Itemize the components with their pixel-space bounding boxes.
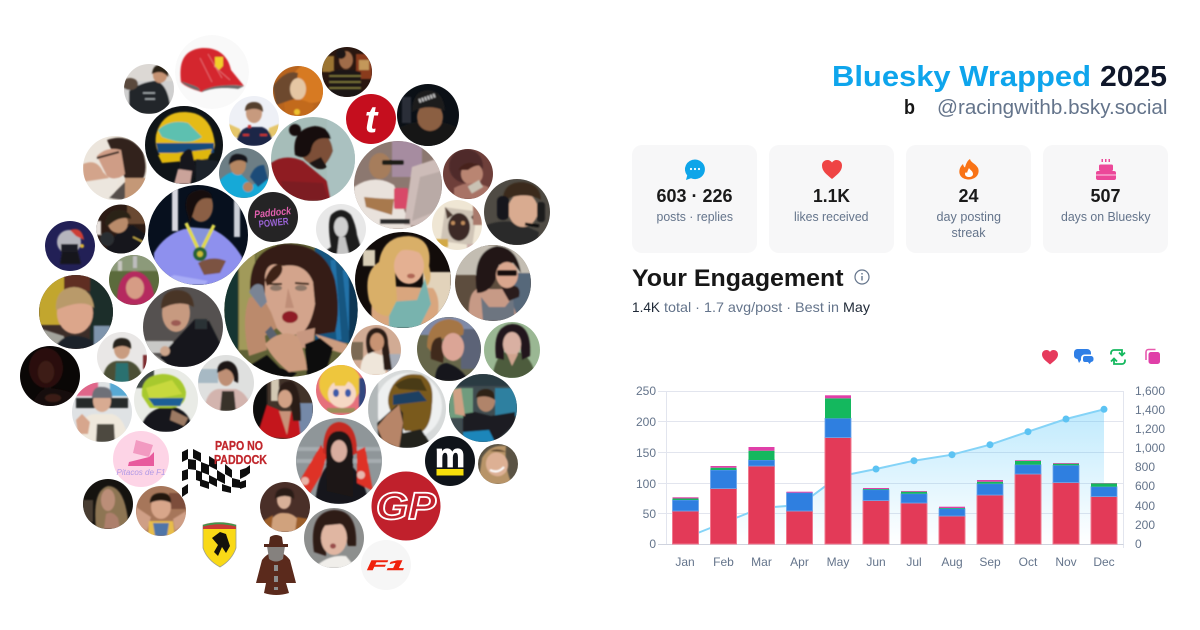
avatar: Papo no Paddock flag logo: PADDOCK xyxy=(214,452,267,467)
avatar: Sailor Moon xyxy=(316,363,366,415)
right axis labels: 800 xyxy=(1135,460,1155,474)
chart legend icons xyxy=(1042,349,1160,364)
right axis labels: 1,000 xyxy=(1135,441,1165,455)
panel: days on Bluesky: days on Bluesky xyxy=(1061,210,1151,224)
avatar: black and white woman xyxy=(316,204,366,254)
avatar: Red Bull driver with wings xyxy=(229,96,279,146)
avatar: driver in dark team kit xyxy=(122,64,174,114)
left axis labels: 200 xyxy=(636,415,656,429)
left axis labels: 50 xyxy=(643,507,656,521)
icon: heart xyxy=(822,160,842,179)
avatar: Papo no Paddock flag logo xyxy=(182,438,267,497)
panel: likes received: likes received xyxy=(794,210,869,224)
right axis labels: 400 xyxy=(1135,499,1155,513)
avatar: Lewis in lilac suit with medal xyxy=(148,185,248,285)
avatar: dark moody red haired woman xyxy=(20,346,80,406)
avatar: red GP logo: GP xyxy=(376,486,437,528)
month labels: Nov xyxy=(1055,555,1077,569)
avatar: m logo xyxy=(425,436,475,486)
avatar: orange hair drag queen xyxy=(273,66,323,116)
right axis labels: 1,200 xyxy=(1135,422,1165,436)
avatar: smiling blonde woman xyxy=(478,444,518,484)
month labels xyxy=(675,555,1115,569)
avatar: man in green sweater xyxy=(97,332,147,382)
avatar: dark haired woman in green xyxy=(484,322,540,378)
avatar: red t logo: t xyxy=(365,99,379,141)
month labels: Mar xyxy=(751,555,772,569)
avatar: man in striped sweater xyxy=(322,47,372,97)
heading: Your Engagement: Your Engagement xyxy=(632,265,844,292)
panel: likes received xyxy=(769,145,894,253)
month labels: Sep xyxy=(979,555,1001,569)
avatar: blonde woman in teal top xyxy=(355,232,451,328)
avatar: woman on phone, largest bubble xyxy=(224,243,359,382)
avatar: chibi anime character xyxy=(45,221,95,271)
bars: replies xyxy=(672,418,1117,516)
chart: monthly engagement stacked bars with cumulative line xyxy=(636,384,1165,569)
month labels: Jul xyxy=(906,555,922,569)
avatar: red GP logo xyxy=(372,472,440,540)
avatar: green and yellow helmet xyxy=(134,368,198,432)
avatar: driver in blue jacket xyxy=(219,148,269,198)
avatar: smiling kid in yellow tank xyxy=(136,486,186,536)
month labels: May xyxy=(827,555,849,569)
avatar: red haired woman drinking xyxy=(443,149,493,199)
avatar: woman in bonnet xyxy=(417,317,481,381)
display name and handle: b xyxy=(904,97,915,119)
avatar: trench coat character xyxy=(256,535,296,595)
right axis labels: 200 xyxy=(1135,518,1155,532)
month labels: Feb xyxy=(713,555,734,569)
avatar: Paddock Power logo xyxy=(248,192,298,242)
avatar: woman with pink hair xyxy=(109,255,159,305)
icon: speech bubble xyxy=(685,159,705,180)
avatar: boy with headset xyxy=(484,179,550,245)
cumulative area and line xyxy=(685,406,1108,544)
avatar: Taylor Swift dark concert xyxy=(83,479,133,529)
avatar: woman hand on chin, white top xyxy=(351,325,401,375)
avatar: Papo no Paddock flag logo: PAPO NO xyxy=(215,438,263,453)
avatar: Paddock Power logo: Paddock xyxy=(254,205,293,221)
avatar: Lewis sunglasses with pink mug xyxy=(354,141,442,229)
panel: day posting streak: 24 xyxy=(958,186,978,206)
right axis labels: 0 xyxy=(1135,537,1142,551)
icon: legend replies xyxy=(1074,349,1094,364)
avatar: F1 logo: F1 xyxy=(367,557,405,573)
avatar: classical painting woman xyxy=(260,482,310,532)
panel: posts and replies: posts · replies xyxy=(656,210,733,224)
month labels: Aug xyxy=(941,555,963,569)
icon: legend reposts xyxy=(1111,350,1125,364)
left axis labels xyxy=(636,384,656,551)
avatar: small dog on screen xyxy=(432,200,482,250)
avatar: woman with glasses lying down xyxy=(83,136,147,200)
bars: likes xyxy=(672,438,1117,544)
engagement summary text: May xyxy=(843,299,870,315)
avatar: Hamilton in red jacket xyxy=(271,117,357,201)
avatar: man in black beanie xyxy=(397,84,459,146)
panel: day posting streak xyxy=(906,145,1031,253)
month labels: Oct xyxy=(1019,555,1038,569)
left axis labels: 100 xyxy=(636,477,656,491)
avatar bubble cluster xyxy=(20,35,550,595)
right axis labels xyxy=(1135,384,1165,551)
avatar: red Ferrari cap xyxy=(179,46,245,94)
avatar: dark haired woman in sunglasses xyxy=(455,245,531,323)
right axis labels: 1,400 xyxy=(1135,403,1165,417)
panel: posts and replies: 603 · 226 xyxy=(656,186,732,206)
avatar: helmet on grey background xyxy=(368,370,446,448)
left axis labels: 0 xyxy=(649,537,656,551)
icon: legend heart xyxy=(1042,350,1058,364)
avatar: woman in red dress xyxy=(253,379,313,439)
avatar: George in black Adidas jacket xyxy=(143,287,223,367)
avatar: Pitacos de F1 pink logo: Pitacos de F1 xyxy=(117,468,165,477)
left axis labels: 250 xyxy=(636,384,656,398)
bars: quotes xyxy=(672,395,1117,508)
icon: birthday cake xyxy=(1096,159,1116,180)
title: 2025 xyxy=(1100,61,1167,93)
icon: flame xyxy=(959,159,979,180)
avatar: blond toddler xyxy=(39,275,114,350)
engagement summary text: 1.4K xyxy=(632,299,661,315)
month labels: Jan xyxy=(675,555,695,569)
avatar: driver in cap, waving xyxy=(72,382,132,442)
avatar: Pitacos de F1 pink logo xyxy=(113,431,169,487)
month labels: Apr xyxy=(790,555,809,569)
avatar: Paddock Power logo: POWER xyxy=(258,216,290,231)
avatar: red t logo xyxy=(346,94,396,144)
avatar: woman in red hoodie xyxy=(296,418,382,504)
right axis labels: 1,600 xyxy=(1135,384,1165,398)
panel: likes received: 1.1K xyxy=(813,186,850,206)
engagement summary text: total · 1.7 avg/post · Best in xyxy=(664,299,839,315)
panel: days on Bluesky xyxy=(1043,145,1168,253)
avatar: m logo: m xyxy=(435,437,465,475)
avatar: woman with short dark hair xyxy=(304,508,364,568)
avatar: F1 logo xyxy=(361,540,411,590)
right axis labels: 600 xyxy=(1135,479,1155,493)
icon: info xyxy=(855,270,869,284)
panel: day posting streak: day posting xyxy=(936,210,1001,224)
month labels: Dec xyxy=(1093,555,1115,569)
title: Bluesky Wrapped xyxy=(832,61,1091,93)
avatar: man looking down, dark shirt xyxy=(96,204,147,254)
bars: reposts xyxy=(672,398,1117,509)
avatar: yellow Senna helmet xyxy=(145,106,223,184)
icon: legend quotes xyxy=(1146,350,1160,364)
left axis labels: 150 xyxy=(636,446,656,460)
avatar: Ferrari shield xyxy=(203,522,236,567)
panel: posts and replies xyxy=(632,145,757,253)
month labels: Jun xyxy=(866,555,886,569)
panel: days on Bluesky: 507 xyxy=(1090,186,1120,206)
panel: day posting streak: streak xyxy=(952,226,986,240)
display name and handle: @racingwithb.bsky.social xyxy=(937,97,1168,119)
avatar: woman in lab xyxy=(198,355,254,411)
avatar: man waving by van window xyxy=(449,374,517,442)
